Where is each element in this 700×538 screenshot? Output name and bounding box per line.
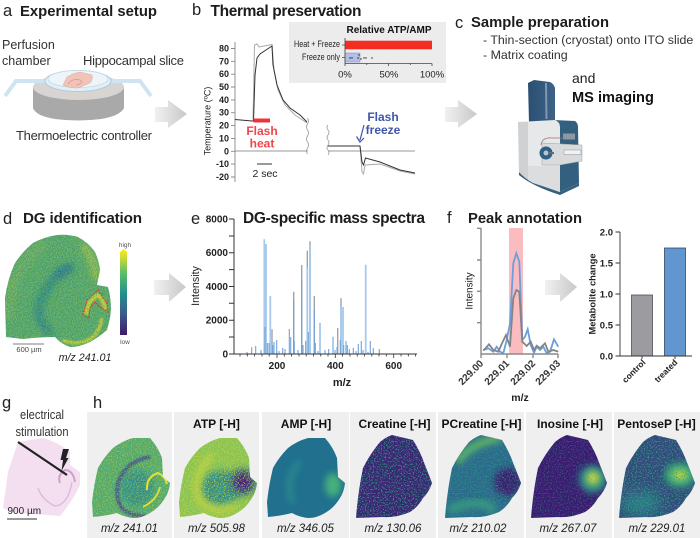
image panel: AMP: AMP [-H] [281, 417, 331, 431]
panel a letter: a [3, 2, 13, 20]
label: perfusion chamber: Perfusion [2, 38, 55, 52]
chart: annotated peak: 229.01 [483, 358, 512, 388]
ion image: m/z 241.01 with DG outline [5, 234, 111, 347]
image panel: m/z 241.01 [85, 412, 175, 538]
scale bar: 600 µm: 600 µm [16, 345, 42, 354]
bar chart: metabolite change: Metabolite change [588, 253, 598, 335]
image panel: ATP: m/z 505.98 [188, 523, 246, 535]
image panel: PCreatine [438, 412, 527, 538]
chart: temperature traces: Temperature (ºC) [202, 87, 212, 155]
panel c: sample preparation [455, 14, 693, 195]
panel b: thermal preservation [192, 1, 446, 182]
icon: thermoelectric controller cylinder [33, 74, 124, 120]
chart: mass spectrum: 600 [385, 361, 402, 372]
bar chart: metabolite change: treated [652, 357, 679, 384]
chart: temperature traces: 10 [219, 133, 229, 143]
chart: mass spectrum: Intensity [190, 265, 202, 306]
chart: mass spectrum: 6000 [206, 248, 228, 259]
chart: temperature traces: 40 [219, 95, 229, 105]
bar chart: metabolite change: 1.0 [600, 290, 613, 300]
colour bar: high [119, 242, 132, 249]
arrow: f to bar chart [545, 273, 577, 302]
panel b letter: b [192, 1, 201, 19]
chart: mass spectrum [190, 214, 417, 389]
icon: perfusion tubing [5, 81, 151, 96]
panel b heading: Thermal preservation [210, 3, 362, 20]
panel e letter: e [191, 210, 200, 228]
panel e: mass spectra [190, 210, 425, 389]
chart: temperature traces: -20 [216, 172, 229, 182]
inset chart: relative ATP/AMP: 50% [379, 70, 399, 80]
label: m/z 241.01: m/z 241.01 [59, 352, 111, 364]
chart: annotated peak: m/z [511, 392, 529, 404]
label: flash freeze: Flash [367, 110, 399, 124]
scale bar: 900 µm: 900 µm [8, 506, 41, 517]
icon: hippocampal slice [63, 72, 92, 88]
label: perfusion chamber: chamber [2, 54, 51, 68]
chart: temperature traces [202, 42, 415, 182]
chart: temperature traces: -10 [216, 159, 229, 169]
panel a: experimental setup [2, 2, 184, 143]
panel d letter: d [3, 210, 12, 228]
panel d heading: DG identification [23, 210, 142, 227]
image panel: m/z 241.01: m/z 241.01 [101, 523, 158, 535]
chart: mass spectrum: 8000 [206, 214, 228, 226]
preparation steps: - Matrix coating [483, 48, 568, 62]
colour bar: low [120, 339, 130, 346]
panel g letter: g [2, 394, 11, 412]
flash heat bar [254, 118, 270, 122]
chart: annotated peak: 229.03 [534, 358, 563, 388]
scale bar: 2 sec: 2 sec [252, 168, 278, 180]
chart: mass spectrum: m/z [333, 377, 352, 389]
image panel: creatine: Creatine [-H] [358, 417, 431, 431]
bar chart: metabolite change: control [620, 357, 647, 385]
chart: temperature traces: 0 [224, 146, 229, 156]
image panel: PentoseP: m/z 229.01 [629, 523, 685, 535]
arrow: b to c [445, 100, 477, 128]
panel a heading: Experimental setup [20, 4, 157, 20]
label: and: and [572, 70, 595, 86]
bar chart: metabolite change: 2.0 [600, 228, 613, 238]
inset chart: relative ATP/AMP: 100% [420, 70, 445, 80]
inset chart: relative ATP/AMP: 0% [338, 70, 352, 80]
arrow: flash freeze [356, 125, 364, 142]
inset chart: relative ATP/AMP: Relative ATP/AMP [346, 25, 432, 36]
label: flash heat: Flash [246, 124, 278, 138]
chart: temperature traces: 30 [219, 108, 229, 118]
image panel: inosine: Inosine [-H] [537, 417, 603, 431]
arrow: d to e [154, 273, 186, 302]
chart: mass spectrum: 400 [327, 361, 344, 372]
chart: annotated peak: Intensity [464, 272, 476, 310]
image panel: PentoseP [613, 412, 700, 538]
chart: annotated peak [457, 228, 563, 404]
chart: mass spectrum: 0 [222, 350, 228, 360]
image panel: creatine [350, 412, 438, 538]
label: thermoelectric controller: Thermoelectric controller [16, 128, 153, 143]
bar chart: metabolite change: 0.0 [600, 352, 613, 362]
chart: temperature traces: 50 [219, 82, 229, 92]
image panel: PCreatine: m/z 210.02 [450, 523, 507, 535]
image panel: PCreatine: PCreatine [-H] [441, 417, 522, 431]
panel f heading: Peak annotation [468, 211, 582, 227]
chart: temperature traces: 60 [219, 69, 229, 79]
chart: mass spectrum: 200 [269, 361, 286, 372]
illustration: stimulated slice [3, 438, 80, 516]
arrow: a to b [155, 100, 187, 128]
label: flash freeze: freeze [366, 123, 401, 137]
icon: perfusion dish [45, 70, 111, 92]
panel g: electrical stimulation [2, 394, 80, 519]
image panel: inosine: m/z 267.07 [540, 523, 597, 535]
colour bar [119, 242, 132, 346]
image panel: inosine [525, 412, 613, 538]
panel h letter: h [93, 394, 102, 412]
bar chart: metabolite change [588, 228, 692, 385]
panel f letter: f [447, 209, 452, 227]
chart: mass spectrum: 4000 [206, 282, 228, 293]
image panel: AMP: m/z 346.05 [277, 523, 335, 535]
inset chart: relative ATP/AMP [289, 22, 446, 83]
chart: temperature traces: 80 [219, 44, 229, 54]
label: electrical stimulation: electrical [20, 408, 64, 422]
panel d: DG identification [0, 210, 142, 364]
inset chart: relative ATP/AMP: Heat + Freeze [294, 39, 340, 50]
label: flash heat: heat [250, 136, 274, 150]
image panel: ATP [172, 412, 262, 538]
panel c letter: c [455, 14, 463, 32]
label: MS imaging: MS imaging [572, 90, 654, 106]
panel f: peak annotation [447, 209, 692, 404]
chart: annotated peak: 229.00 [457, 358, 486, 388]
inset chart: relative ATP/AMP: Freeze only [302, 52, 340, 63]
label: electrical stimulation: stimulation [16, 425, 69, 439]
chart: mass spectrum: 2000 [206, 316, 228, 326]
chart: temperature traces: 20 [219, 121, 229, 131]
bar chart: metabolite change: 1.5 [600, 258, 614, 270]
image panel: ATP: ATP [-H] [193, 417, 240, 431]
panel h: metabolite images [85, 394, 700, 538]
preparation steps: - Thin-section (cryostat) onto ITO slide [483, 33, 693, 47]
image panel: PentoseP: PentoseP [-H] [617, 417, 696, 431]
panel c heading: Sample preparation [471, 15, 609, 31]
label: hippocampal slice: Hippocampal slice [83, 53, 184, 68]
icon: mass spectrometer [518, 80, 582, 195]
panel e heading: DG-specific mass spectra [243, 210, 425, 227]
bar chart: metabolite change: 0.5 [600, 320, 614, 332]
chart: annotated peak: 229.02 [509, 358, 538, 388]
chart: temperature traces: 70 [219, 56, 229, 66]
image panel: AMP [260, 412, 350, 538]
image panel: creatine: m/z 130.06 [365, 523, 422, 535]
